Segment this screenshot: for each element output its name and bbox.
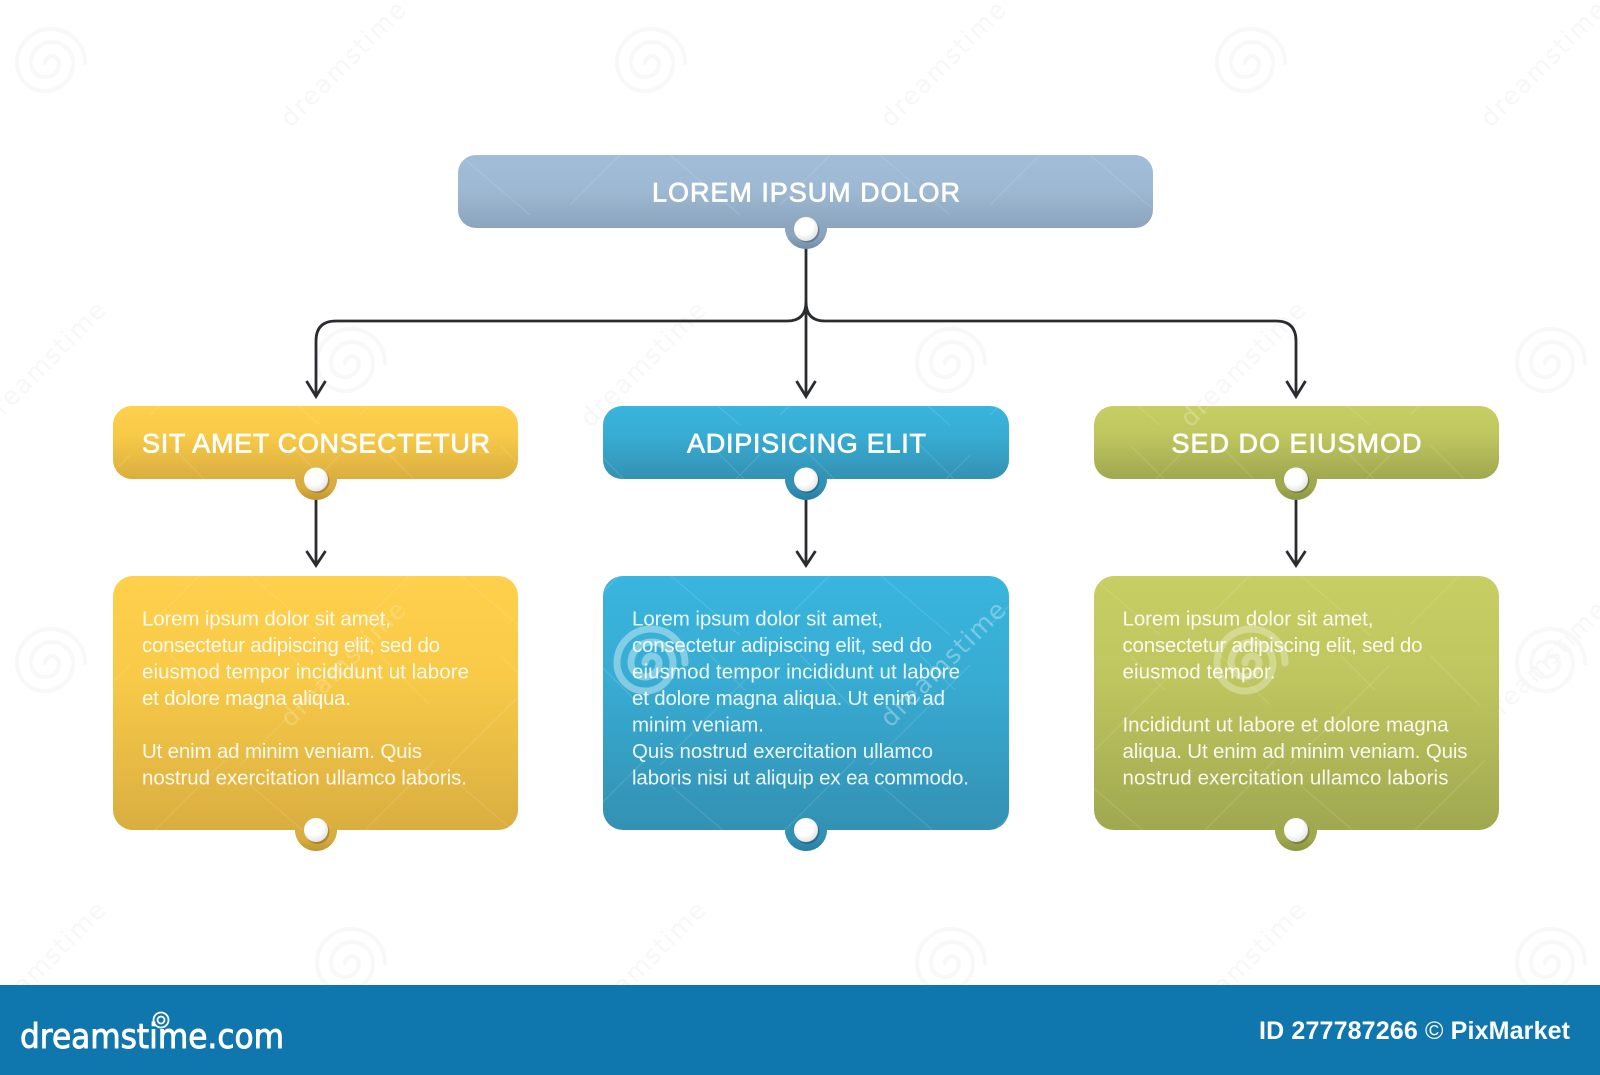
top box: lorem ipsum dolor <box>458 155 1153 249</box>
watermark overlay on coloured boxes: dreamstime <box>574 295 712 433</box>
panel: blue text box <box>603 576 1009 851</box>
panel: yellow text box: Lorem ipsum dolor sit amet, <box>142 608 391 630</box>
header: sed do eiusmod: SED DO EIUSMOD <box>1172 428 1422 458</box>
footer logo text: dreamstime.com <box>20 1017 284 1057</box>
header: adipisicing elit <box>603 406 1009 500</box>
panel: blue text box: laboris nisi ut aliquip ex ea commodo. <box>632 766 969 790</box>
panel: blue text box: consectetur adipiscing elit, sed do <box>632 634 932 657</box>
panel: green text box <box>1094 576 1499 851</box>
watermark overlay on coloured boxes: dreamstime <box>1174 295 1312 433</box>
header: sit amet consectetur <box>113 406 518 500</box>
header: adipisicing elit: ADIPISICING ELIT <box>687 428 926 458</box>
panel: green text box: Lorem ipsum dolor sit amet, <box>1122 608 1374 630</box>
panel: green text box: eiusmod tempor. <box>1122 660 1276 684</box>
panel: blue text box: Quis nostrud exercitation ullamco <box>632 740 933 763</box>
connector lines with arrows from top box to the three headers <box>306 245 1306 396</box>
panel: blue text box: eiusmod tempor incididunt ut labore <box>632 660 960 684</box>
top box: lorem ipsum dolor: LOREM IPSUM DOLOR <box>652 178 960 208</box>
footer bar <box>0 985 1600 1075</box>
panel: yellow text box: et dolore magna aliqua. <box>142 687 351 710</box>
arrows from headers to text panels <box>306 498 1306 566</box>
header: sit amet consectetur: SIT AMET CONSECTETUR <box>142 428 490 458</box>
watermark overlay on coloured boxes: dreamstime <box>274 595 412 733</box>
panel: green text box: Incididunt ut labore et dolore magna <box>1122 714 1449 736</box>
panel: green text box: aliqua. Ut enim ad minim veniam. Quis <box>1122 740 1468 763</box>
footer image id credit: ID 277787266 © PixMarket <box>1259 1017 1571 1045</box>
header: sed do eiusmod <box>1094 406 1499 500</box>
background watermark pattern: dreamstime <box>574 295 712 433</box>
panel: yellow text box: consectetur adipiscing elit, sed do <box>142 634 440 657</box>
panel: blue text box: et dolore magna aliqua. Ut enim ad <box>632 687 945 710</box>
panel: blue text box: Lorem ipsum dolor sit amet, <box>632 608 883 630</box>
panel: yellow text box <box>113 576 518 851</box>
panel: green text box: nostrud exercitation ullamco laboris <box>1122 766 1448 790</box>
panel: yellow text box: nostrud exercitation ullamco laboris. <box>142 766 467 790</box>
panel: blue text box: minim veniam. <box>632 714 764 736</box>
watermark overlay on coloured boxes: dreamstime <box>874 595 1012 733</box>
panel: yellow text box: eiusmod tempor incididunt ut labore <box>142 660 469 684</box>
background watermark pattern: dreamstime <box>574 895 712 1033</box>
background watermark pattern: dreamstime <box>1174 895 1312 1033</box>
icon: logo spiral <box>154 1012 168 1028</box>
background watermark pattern: dreamstime <box>1174 295 1312 433</box>
panel: green text box: consectetur adipiscing elit, sed do <box>1122 634 1422 657</box>
watermark overlay on coloured boxes <box>100 150 1510 840</box>
panel: yellow text box: Ut enim ad minim veniam. Quis <box>142 740 422 763</box>
